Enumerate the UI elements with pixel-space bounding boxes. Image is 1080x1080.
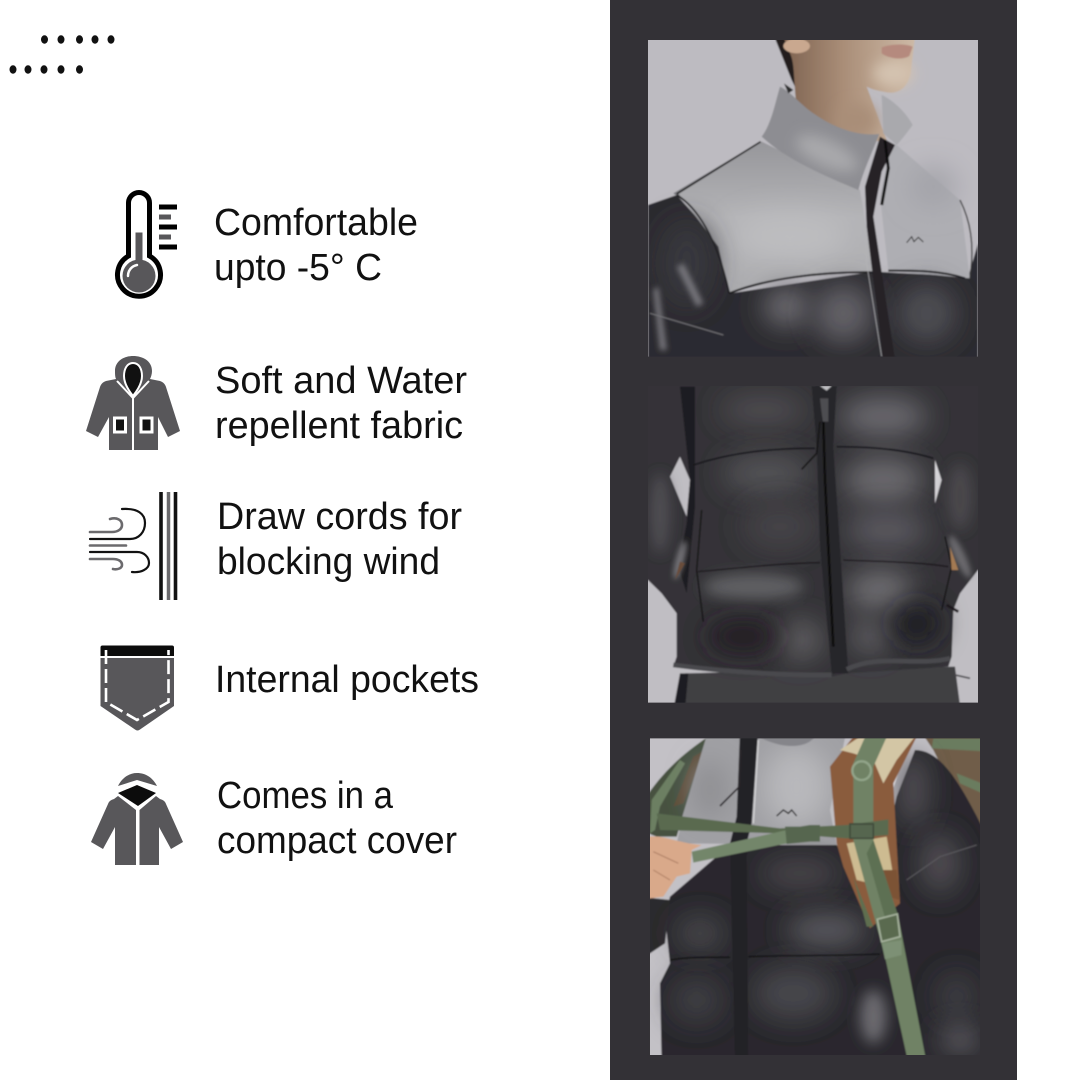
icon: thermometer [118, 192, 177, 296]
backpack left strap [650, 738, 706, 838]
pale upper jacket [677, 730, 847, 845]
pants [684, 666, 960, 703]
buckles [785, 825, 820, 844]
collar [762, 87, 879, 190]
side panel [680, 386, 695, 592]
icon: pocket [100, 646, 174, 730]
zipper [812, 386, 848, 673]
backpack camo [830, 737, 917, 928]
zipper [730, 738, 758, 1017]
text: compact cover: compact cover [217, 820, 457, 862]
body highlights [763, 287, 810, 327]
backpack right rear [924, 738, 980, 826]
text: soft and water repellent: repellent fabric [215, 405, 463, 447]
text: draw cords: blocking wind [217, 541, 440, 583]
text: compact cover [217, 775, 457, 862]
dark lower jacket and sleeve [660, 750, 990, 1063]
icon: wind blocked by cords [90, 492, 176, 600]
sleeve highlights [900, 753, 927, 827]
chest logo [907, 237, 923, 243]
sleeve and lower body [648, 195, 978, 363]
hand [650, 836, 701, 900]
text: draw cords: Draw cords for [217, 496, 462, 538]
hem [673, 658, 950, 675]
backpack straps [853, 733, 927, 1063]
photo: jacket collar and yoke [648, 40, 978, 357]
fabric highlights [840, 397, 927, 437]
text: draw cords [217, 496, 462, 583]
zipper [865, 137, 895, 360]
text: soft and water repellent [215, 360, 467, 447]
dark photo panel [610, 0, 1017, 1080]
hair [774, 40, 796, 86]
photo: jacket front zipper and pockets [640, 380, 987, 713]
icon: coat [91, 773, 183, 865]
icon: hooded jacket [86, 356, 180, 450]
arm gaps [670, 457, 690, 517]
hands in pockets [950, 547, 958, 570]
text: internal pockets: Internal pockets [215, 659, 479, 701]
decorative dots [10, 35, 114, 74]
text: soft and water repellent: Soft and Water [215, 360, 467, 402]
jacket silhouette [640, 380, 987, 677]
text: comfortable: Comfortable [214, 202, 418, 244]
neck and face [783, 37, 915, 143]
photo: jacket with backpack straps [650, 738, 980, 1055]
text: comfortable: upto -5° C [214, 247, 382, 289]
text: compact cover: Comes in a [217, 775, 394, 817]
quilting seams [693, 447, 933, 465]
yoke [678, 142, 873, 293]
text: comfortable [214, 202, 418, 289]
